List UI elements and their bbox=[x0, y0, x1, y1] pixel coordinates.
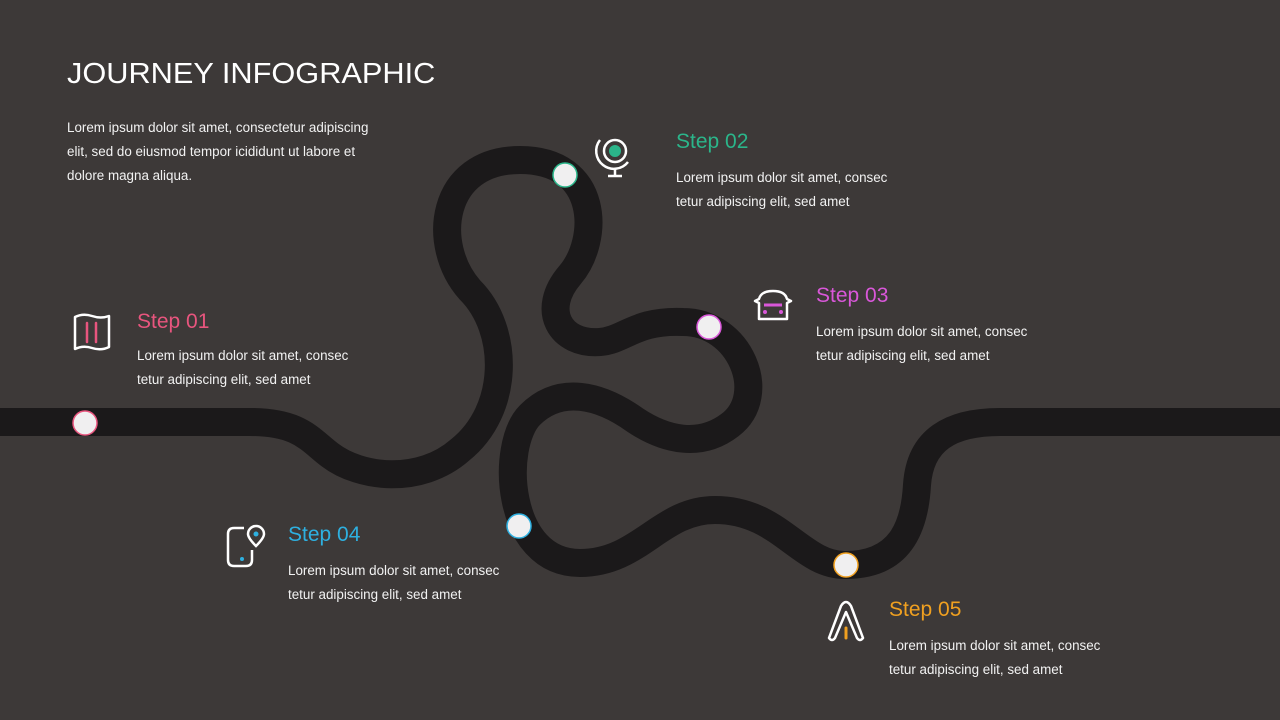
step 04: Step 04 bbox=[288, 523, 360, 546]
step 05 bbox=[889, 598, 1100, 677]
step 03: Step 03 bbox=[816, 284, 888, 307]
step 01: tetur adipiscing elit, sed amet bbox=[137, 372, 310, 387]
step 05: Step 05 bbox=[889, 598, 961, 621]
icon: taxi bbox=[754, 290, 792, 320]
step 01 bbox=[137, 310, 348, 387]
title: JOURNEY INFOGRAPHIC bbox=[67, 58, 435, 90]
icon: globe bbox=[594, 138, 629, 178]
step 05: Lorem ipsum dolor sit amet, consec bbox=[889, 638, 1100, 653]
step 01: Step 01 bbox=[137, 310, 209, 333]
step 04 bbox=[288, 523, 499, 602]
marker step 4 bbox=[507, 514, 531, 538]
step 04: tetur adipiscing elit, sed amet bbox=[288, 587, 461, 602]
step 04: Lorem ipsum dolor sit amet, consec bbox=[288, 563, 499, 578]
marker step 1 bbox=[73, 411, 97, 435]
step 03: Lorem ipsum dolor sit amet, consec bbox=[816, 324, 1027, 339]
step 05: tetur adipiscing elit, sed amet bbox=[889, 662, 1062, 677]
intro text: Lorem ipsum dolor sit amet, consectetur adipiscing elit, sed do eiusmod tempor icididunt ut labore et dolore magna aliqua. bbox=[67, 120, 368, 183]
marker step 3 bbox=[697, 315, 721, 339]
step 03 bbox=[816, 284, 1027, 363]
step 03: tetur adipiscing elit, sed amet bbox=[816, 348, 989, 363]
icon: phone pin bbox=[226, 524, 266, 568]
step 02: Step 02 bbox=[676, 130, 748, 153]
marker step 2 bbox=[553, 163, 577, 187]
icon: road bbox=[828, 600, 864, 642]
step 01: Lorem ipsum dolor sit amet, consec bbox=[137, 348, 348, 363]
icon: map bbox=[74, 314, 110, 350]
step 02 bbox=[676, 130, 887, 209]
marker step 5 bbox=[834, 553, 858, 577]
step 02: tetur adipiscing elit, sed amet bbox=[676, 194, 849, 209]
step 02: Lorem ipsum dolor sit amet, consec bbox=[676, 170, 887, 185]
